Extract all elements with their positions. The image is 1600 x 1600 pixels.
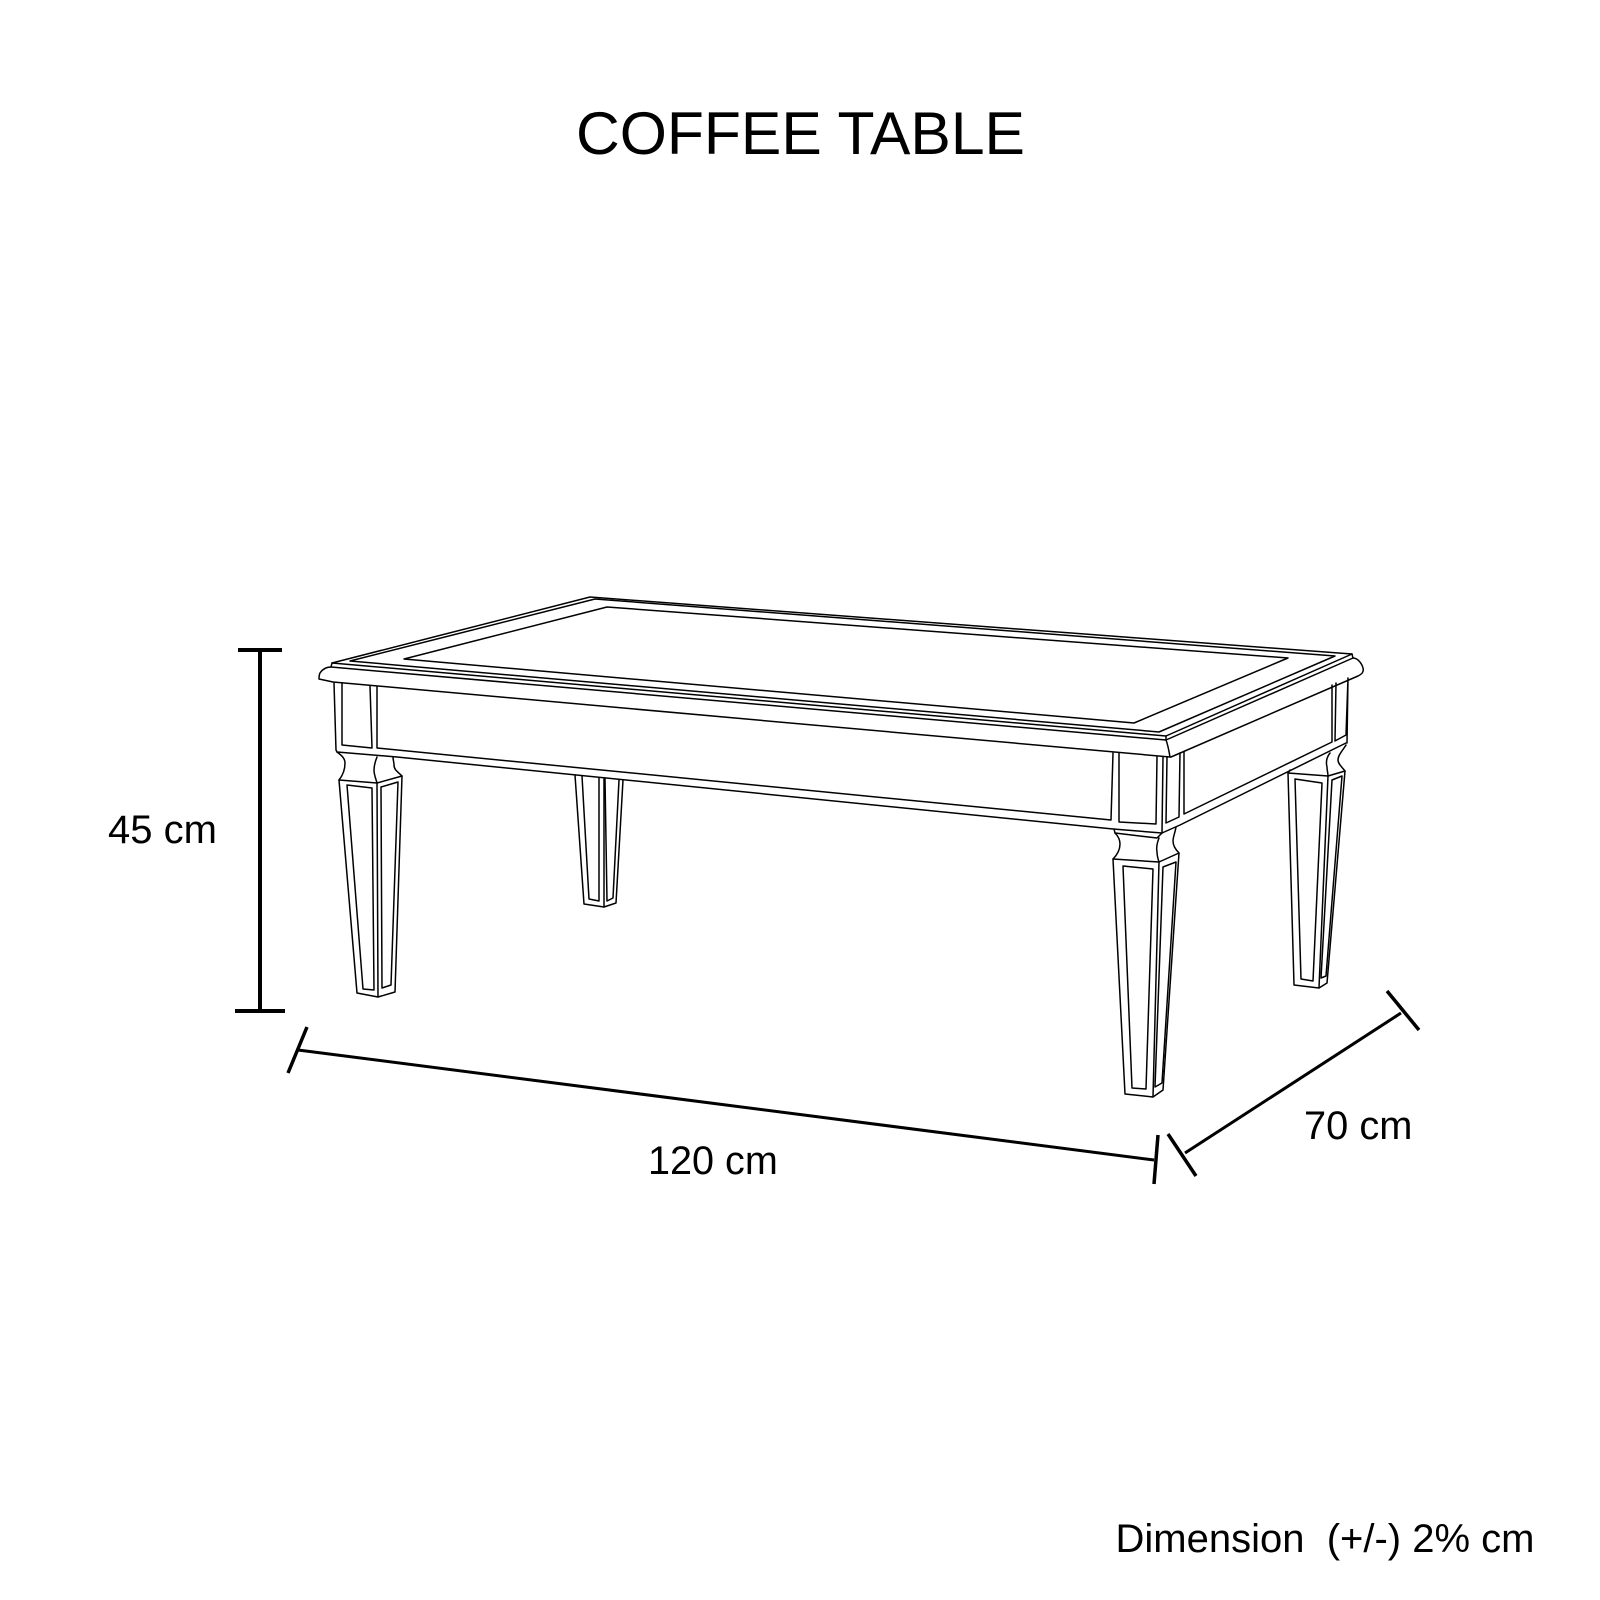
back left leg [575,775,623,907]
table top [319,597,1363,757]
side apron [1166,678,1348,823]
front apron [334,683,1346,833]
front left leg [337,752,402,997]
depth label: 70 cm [1304,1104,1412,1148]
width dimension line [288,1027,1158,1184]
width label: 120 cm [648,1139,778,1183]
height label: 45 cm [108,808,217,852]
tolerance note: Dimension (+/-) 2% cm [1116,1517,1534,1561]
depth dimension line [1168,991,1419,1176]
height dimension line [235,650,285,1011]
back right leg [1288,745,1346,988]
title: COFFEE TABLE [576,99,1025,167]
coffee table line drawing [319,597,1363,1097]
front right leg [1113,827,1179,1097]
